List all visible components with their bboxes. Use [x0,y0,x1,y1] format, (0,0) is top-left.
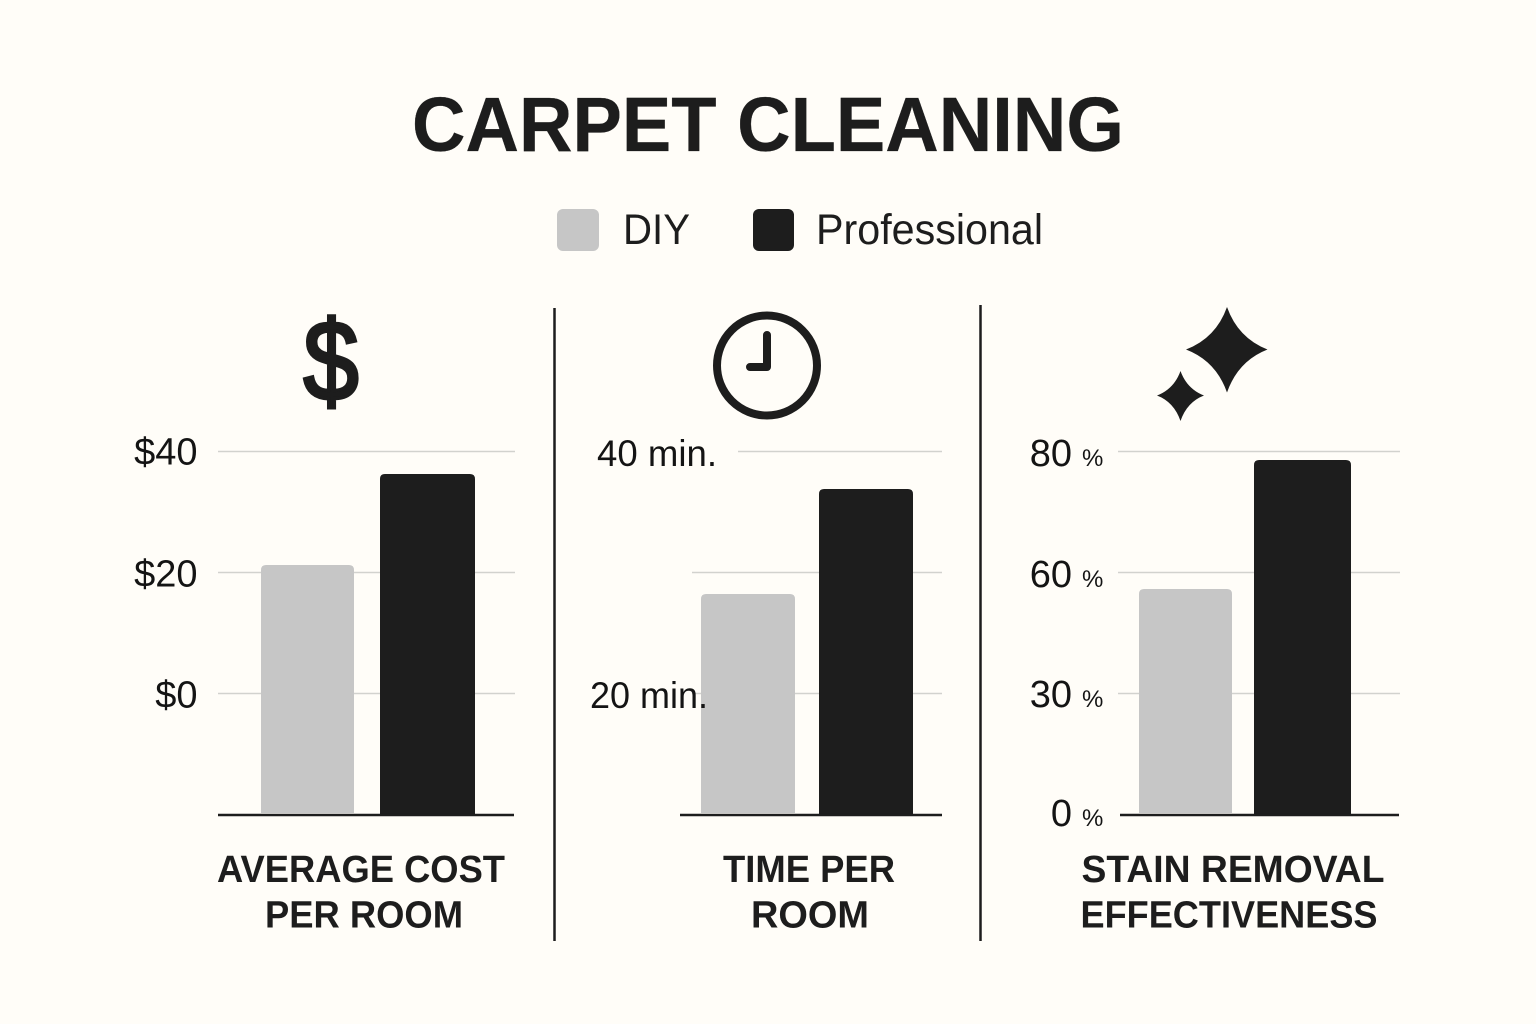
panel: average cost per room [134,298,515,936]
legend [557,206,1043,254]
label: average cost per room [217,849,505,936]
bar: DIY cost [261,565,354,813]
icon: clock [717,316,817,416]
axis labels: percent: % [1082,805,1103,832]
axis labels: percent: 60 [1030,554,1072,596]
label: stain removal effectiveness: STAIN REMOVAL [1082,849,1384,891]
axis labels: percent: % [1082,445,1103,472]
axis labels: cost [134,432,198,716]
axis labels: percent: 0 [1051,793,1072,835]
icon: dollar sign: $ [303,298,359,424]
label: time per room: TIME PER [723,849,895,891]
axis labels: percent: % [1082,566,1103,593]
label: time per room [723,849,895,936]
panel: time per room [590,316,942,936]
axis labels: time [590,433,717,716]
bar: DIY stain removal [1139,589,1232,813]
legend label: DIY: DIY [623,206,690,254]
bar: professional stain removal [1254,460,1351,815]
axis labels: cost: $20 [134,554,198,596]
axis labels: cost: $40 [134,432,198,474]
axis labels: time: 40 min. [597,433,717,474]
axis labels: percent: % [1082,686,1103,713]
axis labels: percent [1030,433,1103,835]
legend swatch: DIY [557,209,599,251]
bar: professional cost [380,474,475,815]
axis labels: time: 20 min. [590,675,708,716]
label: stain removal effectiveness: EFFECTIVENESS [1080,894,1378,936]
axis labels: percent: 30 [1030,674,1072,716]
title: CARPET CLEANING [412,82,1124,168]
legend swatch: Professional [753,209,794,251]
bar: DIY time [701,594,795,813]
label: average cost per room: AVERAGE COST [217,849,505,891]
label: stain removal effectiveness [1080,849,1384,936]
axis labels: percent: 80 [1030,433,1072,475]
label: average cost per room: PER ROOM [265,894,463,936]
icon: sparkles [1157,307,1268,421]
panel: stain removal effectiveness [1030,307,1400,936]
legend label: Professional: Professional [816,206,1043,254]
label: time per room: ROOM [751,894,869,936]
axis labels: cost: $0 [155,674,198,716]
bar: professional time [819,489,913,815]
